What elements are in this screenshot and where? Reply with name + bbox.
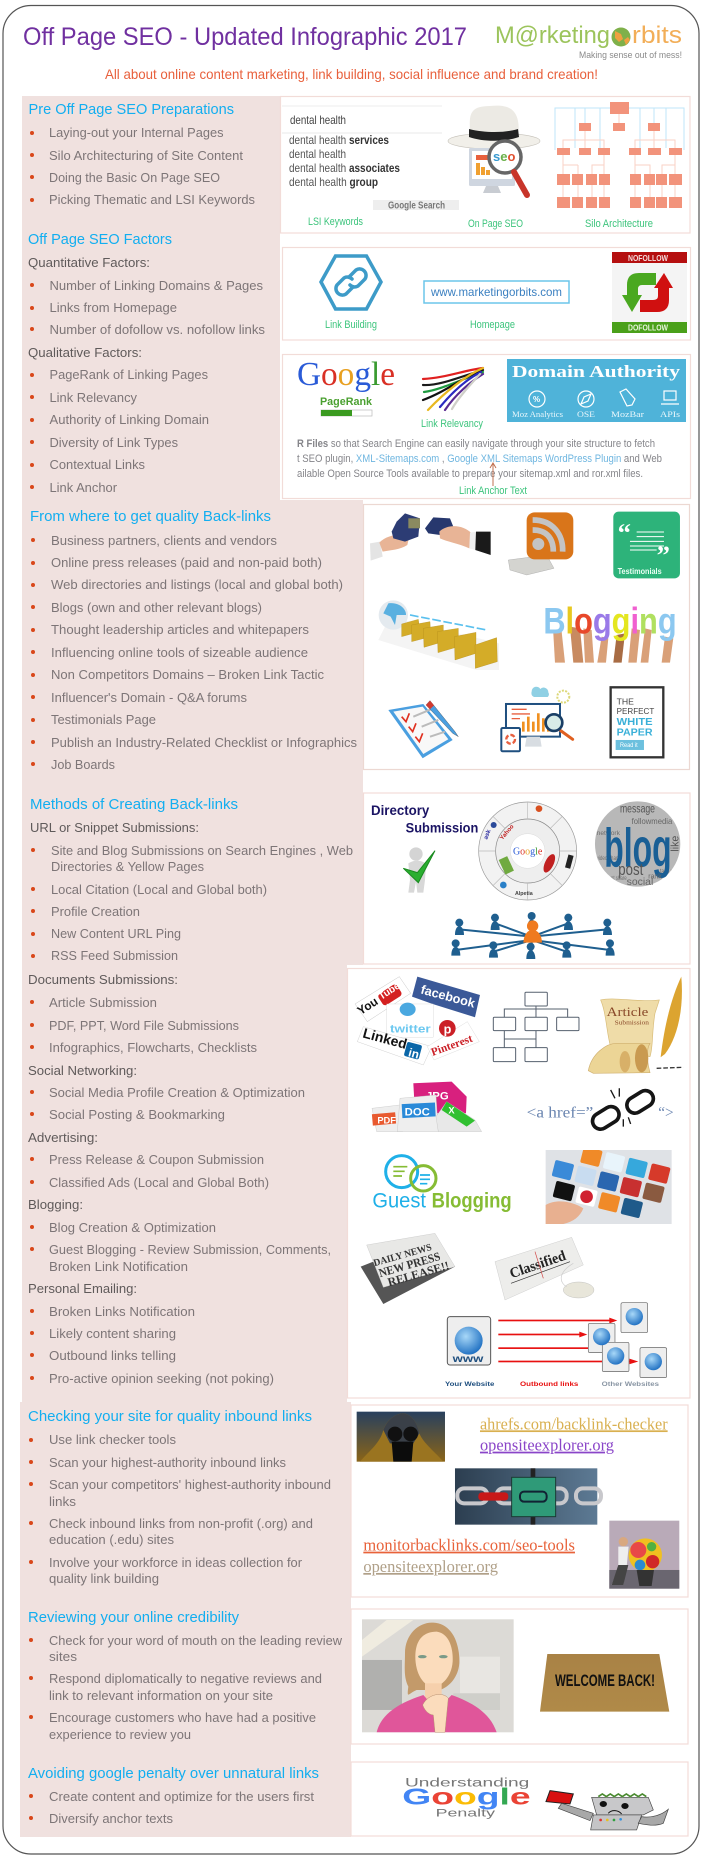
icon: hat and magnifier on page SEO	[448, 106, 540, 230]
banner: domain authority: %	[533, 395, 540, 404]
bullet list: Create content and optimize for the users first	[49, 1789, 314, 1804]
icon: google wheel	[479, 802, 577, 900]
panel: pagerank, relevancy, domain authority, anchor text	[282, 354, 690, 498]
logo: Google PageRank: Google	[297, 356, 395, 393]
bullet list: Use link checker tools	[49, 1432, 176, 1447]
LSI keyword search box: dental health services	[289, 133, 389, 147]
blogging list: Broken Link Notification	[49, 1259, 188, 1274]
bullet list: Job Boards	[51, 757, 115, 772]
quantitative factors list	[28, 255, 265, 337]
logo: understanding google penalty: Google	[402, 1784, 531, 1810]
link anchor text paragraph	[297, 438, 662, 480]
social networking list: Social Posting & Bookmarking	[49, 1107, 225, 1122]
bullet list: Testimonials Page	[51, 712, 156, 727]
bullet list	[29, 1789, 314, 1826]
icon: blog word cloud: post	[618, 860, 644, 879]
icon: article submission scroll: Article	[607, 1005, 649, 1019]
logo: guest blogging: Guest	[372, 1188, 426, 1212]
homepage URL box: Homepage	[470, 319, 515, 331]
icon: google wheel: ask	[483, 828, 493, 840]
icon: nofollow dofollow: DOFOLLOW	[628, 322, 669, 332]
icon: blog word cloud: video share	[597, 855, 620, 862]
icon: testimonials: “	[618, 518, 631, 548]
icon: blog word cloud: social	[627, 877, 653, 888]
URL or snippet submissions list: URL or Snippet Submissions:	[30, 820, 199, 835]
icon: blogging letters: Blogging	[543, 600, 677, 641]
blogging list: Blog Creation & Optimization	[49, 1220, 216, 1235]
icon: hat and magnifier on page SEO: On Page SEO	[468, 218, 523, 230]
bullet list: Business partners, clients and vendors	[51, 533, 277, 548]
LSI keyword search box: Google Search	[388, 200, 445, 212]
icon: puzzle hands	[370, 513, 491, 561]
qualitative factors list: Diversity of Link Types	[50, 435, 178, 450]
icon: backlink network	[451, 912, 615, 959]
qualitative factors list: Authority of Linking Domain	[50, 412, 209, 427]
URL or snippet submissions list: Directories & Yellow Pages	[51, 859, 204, 874]
logo: Google PageRank	[297, 356, 395, 416]
panel: avoiding google penalty	[28, 1765, 319, 1826]
link anchor text paragraph: R Files so that Search Engine can easily navigate through your site structure to fetch	[297, 438, 655, 450]
bullet list: Influencer's Domain - Q&A forums	[51, 690, 247, 705]
bullet list: Involve your workforce in ideas collection for	[49, 1555, 303, 1570]
icon: white paper: Read it	[620, 743, 638, 749]
icon: blog word cloud: message	[620, 802, 655, 816]
panel: credibility images	[351, 1609, 688, 1744]
image: chain with scanned link	[455, 1468, 601, 1525]
panel: quality back-link sources images	[364, 504, 690, 770]
LSI keyword search box	[282, 106, 459, 228]
icon: white paper	[611, 687, 663, 757]
chart: outbound links diagram: Your Website	[445, 1381, 495, 1388]
directory submission figure	[371, 802, 478, 893]
bullet list: Doing the Basic On Page SEO	[49, 170, 220, 185]
URL or snippet submissions list	[30, 820, 353, 963]
icon: social network cards: You	[355, 994, 381, 1018]
icon: social network cards: Linked	[361, 1025, 409, 1052]
panel: from where to get quality back-links	[30, 508, 357, 772]
icon: white paper: WHITE	[617, 717, 653, 728]
homepage URL box	[424, 281, 569, 331]
icon: blog word cloud: network	[597, 830, 621, 837]
bullet list: links	[49, 1494, 77, 1509]
icon: checklist clipboard	[388, 701, 458, 758]
logo: guest blogging	[372, 1156, 512, 1212]
bullet list: Scan your highest-authority inbound links	[49, 1455, 286, 1470]
icon: RSS newspaper	[508, 512, 573, 575]
personal emailing list	[28, 1281, 274, 1386]
personal emailing list: Broken Links Notification	[49, 1304, 195, 1319]
URL or snippet submissions list: Local Citation (Local and Global both)	[51, 882, 267, 897]
icon: document files	[372, 1082, 482, 1132]
label: link anchor text: Link Anchor Text	[459, 485, 527, 497]
LSI keyword search box: dental health associates	[289, 161, 400, 175]
chart: flowchart	[493, 992, 579, 1062]
panel: keywords, on page SEO, silo images	[280, 96, 690, 233]
broken link href snippet: “>	[658, 1104, 674, 1121]
bullet list: Non Competitors Domains – Broken Link Tactic	[51, 667, 325, 682]
chart: outbound links diagram: www	[451, 1354, 484, 1365]
advertising list: Classified Ads (Local and Global Both)	[49, 1175, 269, 1190]
icon: blog word cloud: followmedia	[632, 816, 673, 826]
logo: Google PageRank: PageRank	[320, 396, 373, 408]
quantitative factors list: Number of dofollow vs. nofollow links	[50, 322, 265, 337]
icon: globe and folders	[378, 600, 499, 670]
panel: left column backgrounds	[20, 96, 363, 1837]
qualitative factors list: Contextual Links	[50, 457, 145, 472]
icon: google wheel: Yahoo	[499, 824, 516, 842]
qualitative factors list: Qualitative Factors:	[28, 345, 142, 360]
bullet list: Laying-out your Internal Pages	[49, 125, 224, 140]
icon: article submission scroll	[588, 977, 683, 1073]
icon: testimonials: ”	[657, 540, 670, 570]
social networking list	[28, 1063, 305, 1122]
bullet list	[31, 533, 357, 772]
logo: guest blogging: Blogging	[432, 1188, 512, 1212]
personal emailing list: Pro-active opinion seeking (not poking)	[49, 1371, 274, 1386]
bullet list	[29, 1633, 343, 1742]
blogging list	[28, 1197, 331, 1274]
heading: Pre Off Page SEO Preparations	[28, 101, 234, 118]
icon: social network cards: in	[407, 1045, 421, 1062]
chart: outbound links diagram	[445, 1303, 667, 1388]
LSI keyword search box: LSI Keywords	[308, 216, 363, 228]
social networking list: Social Media Profile Creation & Optimization	[49, 1085, 305, 1100]
bullet list: Picking Thematic and LSI Keywords	[49, 192, 255, 207]
logo: understanding google penalty: Penalty	[436, 1808, 495, 1820]
broken link href snippet: <a href=”	[527, 1104, 593, 1121]
bullet list	[29, 1432, 331, 1586]
icon: google wheel: Google	[513, 846, 543, 857]
label: link relevancy: Link Relevancy	[421, 418, 483, 430]
homepage URL box: www.marketingorbits.com	[430, 285, 562, 299]
bullet list: Encourage customers who have had a positive	[49, 1710, 316, 1725]
icon: blog word cloud: rank	[648, 871, 662, 880]
icon: nofollow dofollow	[612, 252, 687, 333]
icon: white paper: THE	[617, 696, 634, 706]
logo: Marketing Orbits	[495, 22, 682, 61]
bullet list: Diversify anchor texts	[49, 1811, 173, 1826]
icon: blog word cloud: tags web	[660, 866, 680, 875]
bullet list: Silo Architecturing of Site Content	[49, 148, 243, 163]
link anchor text paragraph: ailable Open Source Tools available to prepare your sitemap.xml and ror.xml files.	[297, 468, 643, 480]
panel: directory, wheel, blog, network images	[364, 793, 690, 964]
URL or snippet submissions list: Site and Blog Submissions on Search Engines , Web	[51, 843, 353, 858]
bullet list: Respond diplomatically to negative reviews and	[49, 1671, 322, 1686]
icon: blog word cloud: like	[670, 836, 682, 852]
documents submissions list	[28, 972, 257, 1055]
heading: Methods of Creating Back-links	[30, 796, 238, 813]
icon: link relevancy wires	[423, 368, 483, 410]
panel: reviewing your online credibility	[28, 1609, 343, 1742]
chart: outbound links diagram: Other Websites	[602, 1381, 659, 1388]
quantitative factors list: Number of Linking Domains & Pages	[50, 278, 263, 293]
link anchor text paragraph: t SEO plugin, XML-Sitemaps.com , Google XML Sitemaps WordPress Plugin and Web	[297, 453, 662, 465]
icon: press release newspaper: DAILY NEWS	[372, 1242, 433, 1269]
personal emailing list: Likely content sharing	[49, 1326, 176, 1341]
heading: Avoiding google penalty over unnatural links	[28, 1765, 319, 1782]
icon: social network cards	[355, 977, 480, 1065]
broken link href snippet	[527, 1088, 674, 1132]
banner: domain authority: Domain Authority	[512, 362, 681, 381]
bullet list: Check for your word of mouth on the leading review	[49, 1633, 343, 1648]
icon: document files: X	[448, 1105, 455, 1115]
documents submissions list: PDF, PPT, Word File Submissions	[49, 1018, 239, 1033]
bullet list: Check inbound links from non-profit (.org) and	[49, 1516, 313, 1531]
personal emailing list: Personal Emailing:	[28, 1281, 137, 1296]
icon: blog word cloud	[595, 801, 682, 888]
bullet list: Publish an Industry-Related Checklist or Infographics	[51, 735, 357, 750]
icon: testimonials: Testimonials	[618, 566, 662, 576]
icon: link building hexagon	[321, 256, 381, 331]
icon: white paper: PAPER	[617, 727, 653, 738]
qualitative factors list: Link Anchor	[50, 480, 118, 495]
link: opensiteexplorer purple: opensiteexplorer.org	[480, 1436, 614, 1455]
LSI keyword search box: dental health	[289, 147, 346, 161]
bullet list: Blogs (own and other relevant blogs)	[51, 600, 262, 615]
logo: understanding google penalty: Understanding	[405, 1776, 529, 1790]
image: welcome back mat: WELCOME BACK!	[555, 1671, 655, 1690]
icon: social network cards: p	[444, 1022, 452, 1036]
advertising list: Press Release & Coupon Submission	[49, 1152, 264, 1167]
LSI keyword search box: dental health group	[289, 175, 378, 189]
icon: social network cards: Pinterest	[430, 1033, 474, 1059]
panel: link building, homepage, nofollow images	[282, 248, 690, 340]
icon: classified with mouse	[495, 1237, 594, 1300]
bullet list: Web directories and listings (local and global both)	[51, 577, 343, 592]
title: Off Page SEO - Updated Infographic 2017	[23, 23, 467, 51]
icon: press release newspaper: NEW PRESS	[377, 1249, 442, 1280]
icon: article submission scroll: Submission	[615, 1020, 650, 1027]
icon: blogging letters	[543, 600, 677, 663]
banner: domain authority	[507, 359, 686, 422]
banner: domain authority: APIs	[660, 409, 680, 419]
bullet list: Thought leadership articles and whitepapers	[51, 622, 309, 637]
heading: Off Page SEO Factors	[28, 231, 172, 248]
panel: methods of creating back-links	[28, 796, 353, 1386]
icon: document files: DOC	[405, 1106, 430, 1118]
URL or snippet submissions list: Profile Creation	[51, 904, 140, 919]
icon: robot with red card	[546, 1791, 668, 1830]
advertising list	[28, 1130, 269, 1190]
icon: nofollow dofollow: NOFOLLOW	[628, 253, 669, 263]
qualitative factors list: PageRank of Linking Pages	[50, 367, 208, 382]
LSI keyword search box: dental health	[290, 113, 346, 127]
quantitative factors list: Links from Homepage	[50, 300, 177, 315]
advertising list: Advertising:	[28, 1130, 98, 1145]
logo: understanding google penalty	[402, 1776, 531, 1820]
icon: white paper: PERFECT	[617, 706, 655, 716]
banner: domain authority: OSE	[577, 409, 595, 419]
panel: pre off page SEO preparations	[28, 101, 255, 207]
icon: blog word cloud: comment share	[597, 875, 627, 882]
icon: document files: JPG	[426, 1090, 449, 1102]
documents submissions list: Article Submission	[49, 995, 157, 1010]
image: man with idea bulb	[609, 1521, 679, 1589]
icon: social network cards: Tube	[377, 980, 403, 1002]
icon: press release newspaper	[361, 1233, 455, 1304]
image: thinking woman	[362, 1619, 514, 1732]
icon: social network cards: twitter	[390, 1024, 431, 1036]
bullet list: Scan your competitors' highest-authority inbound	[49, 1477, 331, 1492]
logo: Marketing Orbits: M@rketing	[495, 22, 610, 49]
panel: checking your site for quality inbound links	[28, 1408, 331, 1586]
qualitative factors list: Link Relevancy	[50, 390, 137, 405]
chart: silo architecture: Silo Architecture	[585, 218, 653, 230]
icon: document files: PDF	[377, 1115, 396, 1125]
bullet list	[30, 125, 255, 207]
social networking list: Social Networking:	[28, 1063, 137, 1078]
banner: domain authority: MozBar	[611, 409, 644, 419]
panel: off page SEO factors	[28, 231, 265, 495]
image: welcome back mat	[540, 1654, 669, 1712]
link: monitorbacklinks seo tools: monitorbacklinks.com/seo-tools	[363, 1536, 575, 1555]
blogging list: Guest Blogging - Review Submission, Comments,	[49, 1242, 331, 1257]
bullet list: Online press releases (paid and non-paid both)	[51, 555, 322, 570]
URL or snippet submissions list: RSS Feed Submission	[51, 948, 178, 963]
link: opensiteexplorer tan: opensiteexplorer.org	[363, 1557, 498, 1576]
directory submission figure: Submission	[406, 820, 478, 836]
bullet list: education (.edu) sites	[49, 1532, 174, 1547]
bullet list: link to relevant information on your site	[49, 1688, 273, 1703]
icon: hat and magnifier on page SEO: seo	[493, 149, 515, 164]
image: hacker with binoculars	[357, 1412, 445, 1462]
icon: classified with mouse: Classified	[508, 1248, 568, 1282]
documents submissions list: Documents Submissions:	[28, 972, 178, 987]
bullet list: Influencing online tools of sizeable audience	[51, 645, 308, 660]
logo: Marketing Orbits: Making sense out of mess!	[579, 50, 682, 61]
icon: social keyboard	[546, 1150, 672, 1224]
documents submissions list: Infographics, Flowcharts, Checklists	[49, 1040, 257, 1055]
link: ahrefs backlink checker: ahrefs.com/backlink-checker	[480, 1414, 668, 1433]
bullet list: experience to review you	[49, 1727, 191, 1742]
directory submission figure: Directory	[371, 802, 430, 818]
icon: testimonials	[613, 512, 680, 578]
personal emailing list: Outbound links telling	[49, 1348, 176, 1363]
bullet list: quality link building	[49, 1571, 159, 1586]
banner: domain authority: Moz Analytics	[512, 409, 563, 419]
panel: google penalty images	[351, 1762, 688, 1836]
icon: social network cards: facebook	[419, 983, 477, 1011]
icon: google wheel: Alpetia	[515, 891, 533, 897]
panel: inbound link checker tools	[351, 1405, 688, 1597]
bullet list: sites	[49, 1649, 78, 1664]
chart: silo architecture	[555, 102, 684, 230]
blogging list: Blogging:	[28, 1197, 83, 1212]
heading: Reviewing your online credibility	[28, 1609, 239, 1626]
heading: Checking your site for quality inbound links	[28, 1408, 312, 1425]
icon: press release newspaper: RELEASE!!	[386, 1258, 451, 1289]
heading: From where to get quality Back-links	[30, 508, 271, 525]
icon: analytics devices	[501, 687, 573, 751]
logo: Marketing Orbits: rbits	[632, 22, 682, 49]
URL or snippet submissions list: New Content URL Ping	[51, 926, 181, 941]
arrow: link anchor text	[490, 463, 496, 486]
quantitative factors list: Quantitative Factors:	[28, 255, 150, 270]
chart: outbound links diagram: Outbound links	[520, 1381, 579, 1388]
qualitative factors list	[28, 345, 209, 495]
icon: link building hexagon: Link Building	[325, 319, 377, 331]
subtitle: All about online content marketing, link building, social influence and brand creation!	[105, 66, 598, 82]
panel: submission images	[348, 968, 690, 1398]
